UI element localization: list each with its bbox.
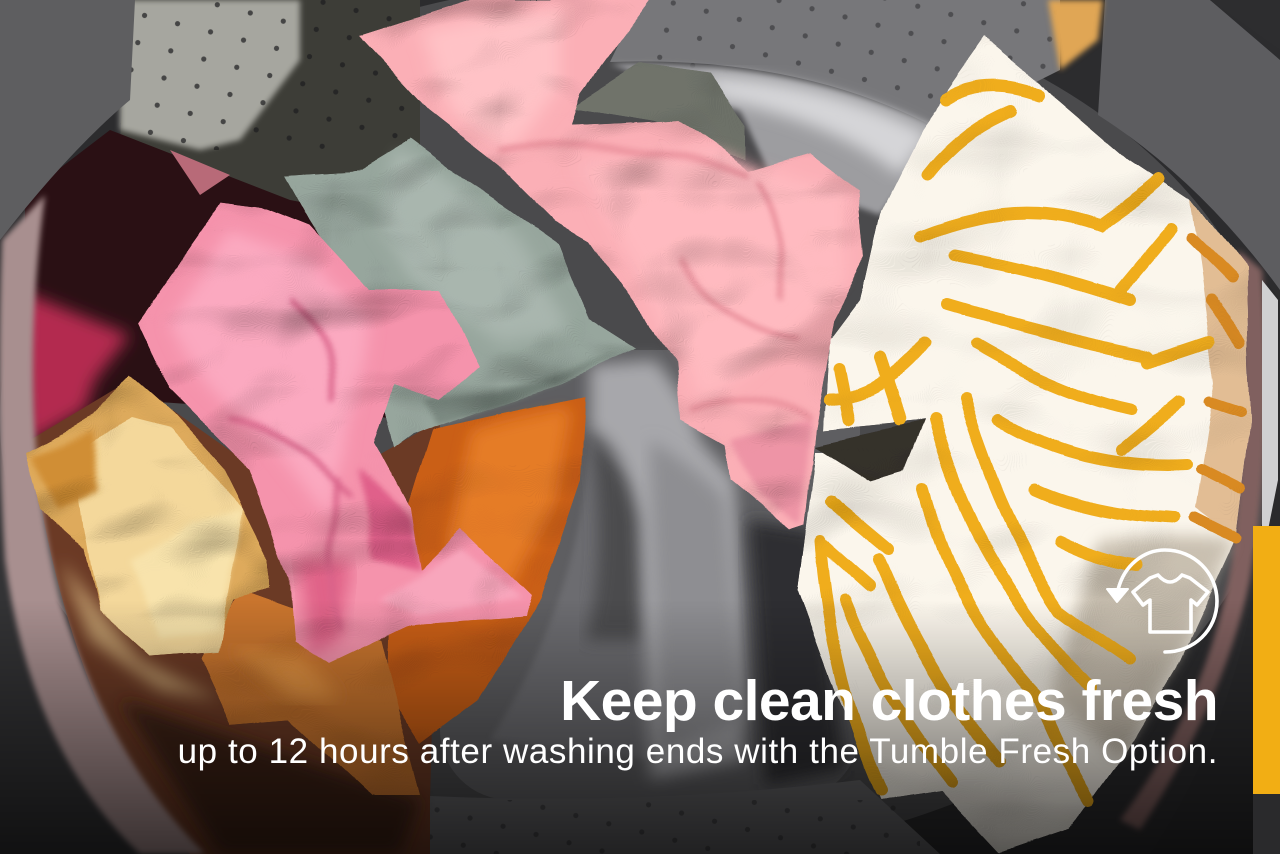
- upper left dark drum wall: [18, 0, 450, 445]
- door ring and gasket: [0, 195, 1280, 854]
- grey-green garment (top): [570, 65, 745, 160]
- pink garment (top centre): [360, 0, 866, 530]
- cream garment: [25, 375, 270, 655]
- icon: tumbling shirt: [1106, 548, 1219, 654]
- subheading: up to 12 hours after washing ends with the Tumble Fresh Option.: [178, 732, 1218, 771]
- bottom darkening gradient: [0, 600, 1253, 854]
- pink garment (left): [137, 200, 530, 663]
- lower left drum shadow: [30, 380, 440, 854]
- headline: Keep clean clothes fresh: [560, 669, 1218, 733]
- accent bar: [1253, 526, 1280, 794]
- grey-green garment (centre): [285, 140, 637, 450]
- orange garment: [200, 397, 585, 795]
- door handles, top corners: [0, 0, 1280, 290]
- white and yellow striped garment: [797, 38, 1250, 854]
